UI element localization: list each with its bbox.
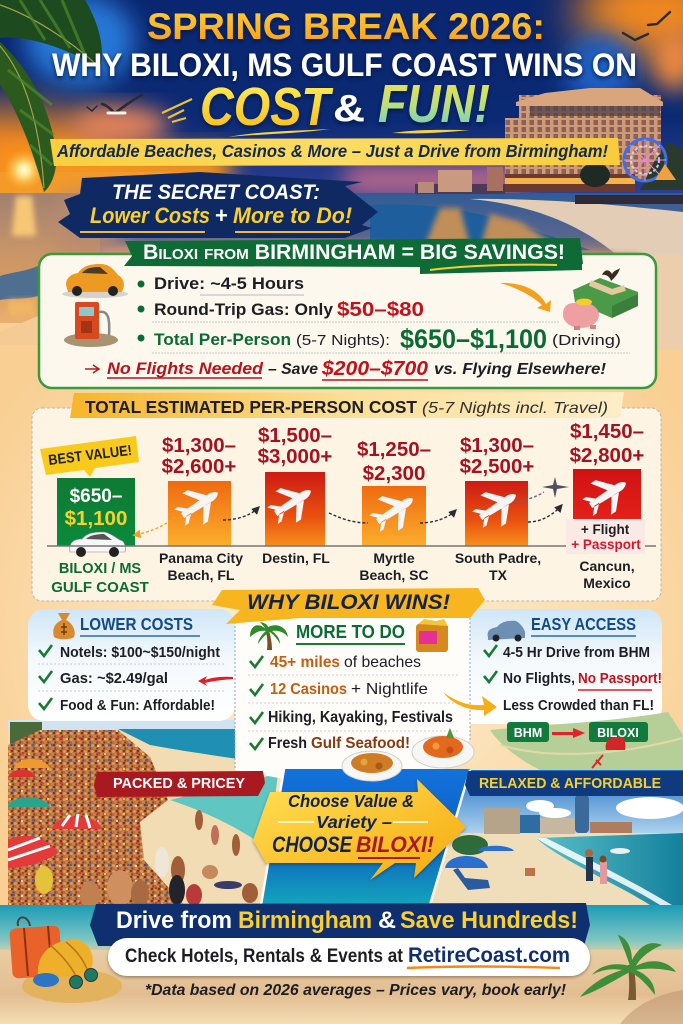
icon: piggy bank with cash xyxy=(563,268,638,328)
subtitle banner xyxy=(50,138,620,166)
list: lower costs: Gas: ~$2.49/gal xyxy=(60,670,168,687)
callout: no flights needed xyxy=(85,358,606,380)
list: easy access: Less Crowded than FL! xyxy=(503,698,654,714)
arrows: dashed routes between bars xyxy=(135,492,561,535)
list: more to do: 45+ miles xyxy=(270,654,340,671)
sign: Biloxi: BILOXI xyxy=(597,726,639,740)
list: easy access xyxy=(484,645,662,714)
banner: packed and pricey: PACKED & PRICEY xyxy=(113,775,245,792)
icon: money bag xyxy=(53,613,75,639)
list: easy access: 4-5 Hr Drive from BHM xyxy=(503,645,650,661)
bar: South Padre: South Padre, xyxy=(455,550,541,566)
bar: Panama City Beach xyxy=(159,434,243,583)
heading: more to do: MORE TO DO xyxy=(296,622,405,642)
text: gas line: $50–$80 xyxy=(337,299,424,321)
panel: lower costs xyxy=(28,609,235,721)
bar: Myrtle Beach: Beach, SC xyxy=(359,567,429,583)
list: more to do: of beaches xyxy=(344,654,421,671)
bar: Biloxi: $650– xyxy=(70,486,122,507)
list: more to do: + Nightlife xyxy=(351,681,428,698)
icon: small grey plane xyxy=(542,477,569,498)
bar: Myrtle Beach: Myrtle xyxy=(373,550,415,566)
headline line 2: WHY BILOXI, MS GULF COAST WINS ON xyxy=(52,47,637,83)
panel: cost comparison chart xyxy=(32,392,661,601)
background: bottom beach xyxy=(0,905,683,1024)
icon: small palm tree xyxy=(580,935,676,1000)
bar: Cancun: Mexico xyxy=(583,575,631,591)
text: total per-person line: Total Per-Person xyxy=(154,331,291,349)
bar: Panama City Beach: Panama City xyxy=(159,550,243,566)
chart heading: (5-7 Nights incl. Travel) xyxy=(422,400,608,417)
plate 1 xyxy=(342,751,402,781)
icon: seafood plates xyxy=(342,728,474,781)
callout: the secret coast: THE SECRET COAST: xyxy=(112,181,320,204)
bar: Destin xyxy=(258,424,332,566)
plate 2 xyxy=(412,728,474,768)
heading banner: big savings: Biloxi from BIRMINGHAM = BIG SAVINGS! xyxy=(143,241,565,264)
callout: the secret coast: More to Do! xyxy=(233,203,352,228)
banner: packed and pricey xyxy=(94,771,265,797)
bar: Myrtle Beach xyxy=(357,438,431,583)
icon: orange arrow xyxy=(500,283,551,312)
chart heading: TOTAL ESTIMATED PER-PERSON COST xyxy=(85,397,417,417)
list: easy access: No Flights, xyxy=(503,671,575,687)
headline line 1: SPRING BREAK 2026: xyxy=(147,6,545,47)
text: gas line: Round-Trip Gas: Only xyxy=(154,301,334,319)
text: drive line: Drive: ~4-5 Hours xyxy=(154,275,304,293)
sunbathers xyxy=(35,810,258,909)
bar: Cancun: $2,800+ xyxy=(570,444,644,467)
callout: the secret coast: Lower Costs xyxy=(90,203,210,228)
text: total per-person line: (5-7 Nights): xyxy=(296,332,390,349)
bar: Myrtle Beach: $2,300 xyxy=(363,462,425,485)
banner: drive from Birmingham: & xyxy=(378,907,396,934)
text: gas line xyxy=(138,299,424,321)
photo: relaxed and affordable Biloxi beach xyxy=(430,770,683,905)
bar: South Padre: TX xyxy=(489,567,508,583)
bar: Destin: $3,000+ xyxy=(258,445,332,468)
headline line 3: cost and fun: COST xyxy=(200,77,333,137)
label: Biloxi / MS Gulf Coast xyxy=(51,561,149,596)
sea xyxy=(0,193,683,265)
panel: more to do xyxy=(235,618,470,780)
icon: setting sun xyxy=(4,150,44,190)
headline line 3: cost and fun xyxy=(200,74,490,137)
list: more to do: Fresh xyxy=(268,735,307,752)
icon: palm trees xyxy=(250,622,288,650)
background: sunset sky and sea scene xyxy=(0,0,683,350)
heading banner: why Biloxi wins: WHY BILOXI WINS! xyxy=(247,591,450,614)
call to action pill: Check Hotels, Rentals & Events at xyxy=(125,945,403,967)
callout: no flights needed: vs. Flying Elsewhere! xyxy=(434,361,606,378)
call to action pill: RetireCoast.com xyxy=(408,944,570,967)
bar: South Padre xyxy=(455,434,541,583)
list: more to do: Hiking, Kayaking, Festivals xyxy=(268,709,453,726)
headline line 3: cost and fun: & xyxy=(333,88,365,130)
photo: packed and pricey beach crowd xyxy=(0,720,285,910)
call to action pill xyxy=(108,938,590,976)
icon: yellow curved arrow xyxy=(443,692,497,716)
bar: Cancun: + Flight xyxy=(581,522,630,537)
callout arrow: choose Biloxi: Variety – xyxy=(316,812,392,832)
bar: South Padre: $1,300– xyxy=(460,434,534,457)
bar: Destin: $1,500– xyxy=(258,424,332,447)
callout arrow: choose Biloxi: Choose Value & xyxy=(288,791,414,811)
bar: Cancun: $1,450– xyxy=(570,420,644,443)
text: total per-person line: (Driving) xyxy=(552,332,621,349)
callout: best value: BEST VALUE! xyxy=(48,443,133,469)
bar: Panama City Beach: $2,600+ xyxy=(162,455,236,478)
list: more to do: Gulf Seafood! xyxy=(311,735,410,752)
heading banner: big savings xyxy=(124,238,583,274)
bar: Panama City Beach: $1,300– xyxy=(162,434,236,457)
bar: Panama City Beach: Beach, FL xyxy=(168,567,235,583)
list: lower costs xyxy=(38,644,226,714)
heading: easy access: EASY ACCESS xyxy=(531,614,636,634)
bar: Myrtle Beach: $1,250– xyxy=(357,438,431,461)
banner: drive from Birmingham: Drive from xyxy=(116,907,232,934)
bar: Cancun: Cancun, xyxy=(579,558,635,574)
callout arrow: choose Biloxi xyxy=(253,779,466,880)
footnote: *Data based on 2026 averages – Prices vary, book early! xyxy=(145,982,567,999)
chart heading xyxy=(70,392,624,418)
panel: savings from Birmingham xyxy=(39,238,656,388)
icon: gas pump xyxy=(64,302,118,347)
icon: red car xyxy=(606,737,625,750)
icons: seagulls xyxy=(87,12,670,113)
icon: orange car xyxy=(62,264,128,298)
page background: sand body xyxy=(0,300,683,940)
illustration: beachfront casino hotel and skyline xyxy=(415,88,683,204)
bar: Cancun xyxy=(566,420,645,591)
list: more to do xyxy=(248,654,458,752)
bar: South Padre: $2,500+ xyxy=(460,455,534,478)
banner: drive from Birmingham xyxy=(90,903,590,946)
heading banner: why Biloxi wins xyxy=(212,588,485,624)
callout arrow: choose Biloxi: CHOOSE xyxy=(272,832,353,857)
text: total per-person line: $650–$1,100 xyxy=(400,324,547,354)
sign: BHM: BHM xyxy=(514,726,542,740)
list: more to do: 12 Casinos xyxy=(270,681,347,698)
callout: best value xyxy=(40,436,139,477)
callout: no flights needed: $200–$700 xyxy=(321,358,428,380)
banner: relaxed and affordable: RELAXED & AFFORDABLE xyxy=(479,775,661,792)
title xyxy=(52,6,637,137)
banner: drive from Birmingham: Save Hundreds! xyxy=(400,907,578,934)
label: Biloxi / MS Gulf Coast: GULF COAST xyxy=(51,579,149,596)
callout: no flights needed: – Save xyxy=(268,361,318,378)
sign: BHM xyxy=(507,722,549,742)
bar: Destin: Destin, FL xyxy=(262,550,330,566)
icon: BHM to Biloxi map xyxy=(490,712,683,770)
text: total per-person line xyxy=(138,322,630,354)
banner: drive from Birmingham: Birmingham xyxy=(238,907,372,934)
bar: Biloxi xyxy=(57,478,135,557)
callout: no flights needed: No Flights Needed xyxy=(107,359,264,378)
heading: lower costs: LOWER COSTS xyxy=(80,614,193,634)
arrow: route xyxy=(552,728,585,738)
banner: relaxed and affordable xyxy=(465,771,683,796)
panel: easy access xyxy=(456,609,662,724)
photo: central blue water xyxy=(261,769,470,905)
callout arrow: choose Biloxi: BILOXI! xyxy=(356,832,434,857)
list: easy access: No Passport! xyxy=(578,671,662,687)
icon: blue car xyxy=(488,621,525,642)
callout: the secret coast: + xyxy=(215,203,228,228)
list: lower costs: Notels: $100~$150/night xyxy=(60,644,220,661)
bar: Cancun: + Passport xyxy=(571,537,641,552)
bar: Biloxi: $1,100 xyxy=(65,507,127,530)
subtitle banner: Affordable Beaches, Casinos & More – Just a Drive from Birmingham! xyxy=(56,141,608,161)
icon: luggage, hat and goggles xyxy=(9,917,122,1003)
palm tree top left xyxy=(0,0,102,192)
right beach xyxy=(470,199,683,262)
headline line 3: cost and fun: FUN! xyxy=(378,74,490,134)
label: Biloxi / MS Gulf Coast: BILOXI / MS xyxy=(59,561,141,577)
list: lower costs: Food & Fun: Affordable! xyxy=(60,697,215,714)
icon: red arrow xyxy=(198,676,233,686)
icon: casino jackpot xyxy=(416,619,448,652)
sign: Biloxi xyxy=(589,722,648,742)
callout: the secret coast xyxy=(58,172,378,238)
umbrellas xyxy=(7,759,102,868)
